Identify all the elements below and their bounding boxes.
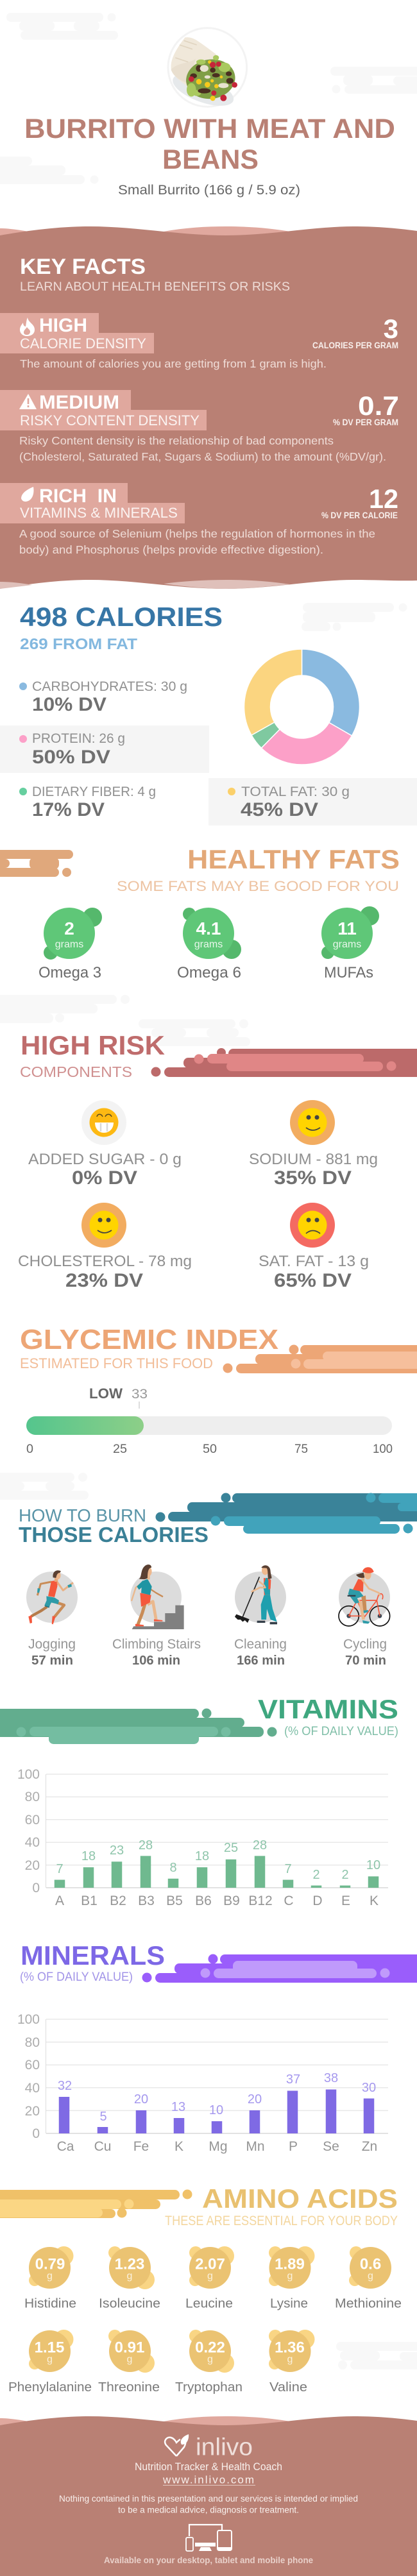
badge: omega 3: 2 [64, 919, 74, 938]
bar chart: minerals: K [174, 2139, 183, 2154]
gray row panels [0, 725, 417, 826]
bar chart: minerals: 20 [134, 2092, 148, 2106]
gauge scale [26, 1442, 393, 1456]
bar chart: minerals: P [289, 2139, 298, 2154]
amino: methionine: 0.6 [360, 2255, 381, 2273]
food image: burrito [168, 28, 247, 112]
bar chart: minerals: 80 [25, 2035, 40, 2050]
bar chart: vitamins: 7 [56, 1862, 64, 1876]
icon: warning triangle [19, 394, 37, 409]
fact: calorie density: 3 [384, 314, 398, 344]
legend: protein: PROTEIN: 26 g [32, 731, 125, 746]
tagline: Nutrition Tracker & Health Coach [135, 2461, 282, 2473]
bar chart: vitamins: B12 [248, 1894, 273, 1908]
logo: inlivo [165, 2434, 253, 2461]
bar chart: vitamins: B9 [223, 1894, 240, 1908]
gauge scale: 75 [294, 1442, 308, 1456]
disclaimer: to be a medical advice, diagnosis or treatment. [118, 2504, 299, 2514]
fact: calorie density: CALORIE DENSITY [20, 335, 146, 352]
amino: tryptophan: g [207, 2354, 213, 2365]
amino: tryptophan: Tryptophan [175, 2380, 243, 2394]
heading: amino acids: AMINO ACIDS [202, 2183, 398, 2214]
bar chart: vitamins: E [341, 1894, 350, 1908]
bar chart: minerals: 37 [286, 2072, 300, 2087]
panel: amino acids [0, 2183, 402, 2394]
bar chart: minerals: Mn [246, 2139, 265, 2154]
heading: calories: 498 CALORIES [20, 602, 223, 632]
badge: omega 3: grams [55, 939, 83, 950]
bar chart: minerals: 10 [209, 2103, 223, 2117]
bar chart: vitamins: 80 [25, 1790, 40, 1804]
bar chart: minerals: 5 [99, 2110, 107, 2124]
badge: omega 6: 4.1 [196, 919, 221, 938]
item: cholesterol: 23% DV [65, 1270, 143, 1291]
item: sodium: SODIUM - 881 mg [249, 1151, 378, 1168]
heading: those calories: THOSE CALORIES [19, 1523, 208, 1546]
amino: leucine: Leucine [185, 2296, 233, 2310]
bar chart: vitamins: 2 [312, 1868, 320, 1882]
bar chart: vitamins: B6 [195, 1894, 212, 1908]
item: added sugar: ADDED SUGAR - 0 g [28, 1151, 182, 1168]
heading: high risk: HIGH RISK [21, 1030, 165, 1060]
amino: lysine: Lysine [270, 2296, 308, 2310]
decorative streak: high risk [151, 1048, 417, 1077]
item: added sugar [28, 1100, 182, 1189]
subheading: (% OF DAILY VALUE) [284, 1725, 398, 1738]
decorative streak: glycemic [223, 1344, 417, 1373]
bar chart: vitamins: K [370, 1894, 379, 1908]
bar chart: minerals: 60 [25, 2058, 40, 2072]
amino: lysine [269, 2246, 314, 2310]
subheading: (% OF DAILY VALUE) [20, 1970, 133, 1984]
exercise: climbing stairs: 106 min [132, 1654, 180, 1668]
bar chart: vitamins: 40 [25, 1835, 40, 1850]
decorative streak: minerals [142, 1954, 417, 1983]
exercise: cleaning [234, 1565, 287, 1668]
donut chart [244, 649, 359, 765]
bar chart: vitamins [17, 1767, 388, 1908]
amino: phenylalanine: Phenylalanine [8, 2380, 92, 2394]
legend: dietary fiber: DIETARY FIBER: 4 g [32, 784, 156, 799]
amino: lysine: 1.89 [275, 2255, 305, 2273]
heading: glycemic index: GLYCEMIC INDEX [20, 1324, 278, 1355]
amino: leucine: g [207, 2271, 213, 2282]
exercise: jogging: Jogging [28, 1637, 76, 1652]
amino: methionine [335, 2246, 402, 2310]
amino: valine: 1.36 [275, 2339, 305, 2357]
panel: glycemic index [20, 1324, 417, 1456]
bar chart: minerals: Zn [362, 2139, 377, 2154]
amino: valine: g [287, 2354, 293, 2365]
exercise: cycling [339, 1567, 390, 1668]
bar chart: vitamins: B5 [166, 1894, 183, 1908]
badge: omega 6 [177, 908, 241, 981]
bar chart: minerals: 20 [25, 2104, 40, 2119]
bar chart: minerals [17, 2012, 388, 2154]
item: saturated fat [259, 1203, 369, 1291]
amino: leucine [185, 2246, 234, 2310]
amino: threonine [98, 2330, 160, 2394]
exercise: jogging: 57 min [31, 1654, 73, 1668]
bar chart: vitamins: 2 [341, 1868, 349, 1882]
badge: omega 3 [38, 908, 102, 981]
fact: calorie density: CALORIES PER GRAM [312, 341, 398, 350]
bar chart: vitamins: 18 [195, 1849, 209, 1863]
fact: risky content density: RISKY CONTENT DENSITY [20, 412, 200, 428]
legend: dietary fiber: 17% DV [32, 799, 105, 820]
bar chart: minerals: Cu [94, 2139, 111, 2154]
item: saturated fat: SAT. FAT - 13 g [259, 1253, 369, 1270]
bar chart: minerals: 38 [324, 2071, 338, 2085]
legend: carbohydrates: 10% DV [32, 694, 106, 715]
title: BEANS [162, 144, 259, 175]
icon: leaf [21, 487, 33, 502]
bar chart: minerals: Se [323, 2139, 339, 2154]
fact: risky content density: 0.7 [358, 391, 399, 421]
panel: footer [0, 2416, 417, 2576]
panel: calories [0, 602, 417, 826]
website: www.inlivo.com [162, 2473, 254, 2486]
badge: mufas: 11 [337, 919, 357, 938]
bar chart: minerals: 100 [17, 2012, 40, 2027]
legend: carbohydrates: CARBOHYDRATES: 30 g [32, 679, 187, 694]
amino: isoleucine: g [127, 2271, 132, 2282]
item: saturated fat: 65% DV [274, 1270, 352, 1291]
legend: total fat: 45% DV [241, 799, 318, 820]
amino: histidine: Histidine [24, 2296, 76, 2310]
disclaimer [59, 2493, 358, 2514]
gauge label: LOW [89, 1385, 123, 1402]
fact: risky content density: MEDIUM [39, 392, 119, 413]
gauge scale: 0 [26, 1442, 33, 1456]
logo: inlivo: inlivo [196, 2434, 253, 2461]
amino: leucine: 2.07 [195, 2255, 225, 2273]
legend: protein [19, 731, 125, 768]
bar chart: vitamins: 100 [17, 1767, 40, 1782]
subheading: from fat: 269 FROM FAT [20, 636, 137, 653]
title: BURRITO WITH MEAT AND [24, 114, 395, 144]
fact: rich in vitamins and minerals: VITAMINS & MINERALS [20, 505, 178, 521]
badge: omega 3: Omega 3 [38, 964, 101, 981]
panel: vitamins [0, 1694, 398, 1908]
amino: threonine: g [127, 2354, 132, 2365]
subheading: ESTIMATED FOR THIS FOOD [20, 1355, 213, 1371]
fact: calorie density: HIGH [39, 315, 87, 336]
fact: calorie density: The amount of calories you are getting from 1 gram is high. [20, 357, 327, 370]
heading: key facts: KEY FACTS [20, 255, 146, 279]
disclaimer: Nothing contained in this presentation and our services is intended or implied [59, 2493, 358, 2504]
badge: mufas: grams [333, 939, 361, 950]
bar chart: vitamins: 25 [224, 1841, 238, 1855]
legend: protein: 50% DV [32, 747, 110, 768]
exercise: jogging [26, 1570, 78, 1668]
fact: rich in vitamins and minerals: A good source of Selenium (helps the regulation of hormones in the [19, 527, 375, 540]
bar chart: minerals: 13 [171, 2100, 185, 2114]
bar chart: minerals: Mg [208, 2139, 228, 2154]
amino: threonine: 0.91 [115, 2339, 144, 2357]
amino: histidine [24, 2246, 76, 2310]
panel: healthy fats [0, 844, 400, 981]
fact: calorie density [0, 313, 398, 370]
badge: omega 6: grams [194, 939, 223, 950]
item: added sugar: 0% DV [72, 1167, 137, 1189]
amino: methionine: Methionine [335, 2296, 402, 2310]
bar chart: vitamins: 10 [366, 1858, 380, 1872]
panel: high risk components [18, 1030, 417, 1291]
amino: histidine: 0.79 [35, 2255, 65, 2273]
bar chart: vitamins: 18 [81, 1849, 96, 1863]
decorative streak: healthy fats [0, 850, 73, 877]
heading: minerals: MINERALS [21, 1940, 165, 1970]
amino: phenylalanine: 1.15 [35, 2339, 64, 2357]
fact: rich in vitamins and minerals: RICH IN [39, 486, 117, 507]
panel: minerals [17, 1940, 417, 2154]
bar chart: vitamins: 20 [25, 1858, 40, 1873]
subheading: LEARN ABOUT HEALTH BENEFITS OR RISKS [20, 280, 290, 294]
bar chart: vitamins: 60 [25, 1813, 40, 1827]
bar chart: vitamins: 0 [32, 1881, 40, 1895]
decorative streak: amino acids [0, 2190, 192, 2218]
fact: rich in vitamins and minerals: 12 [369, 484, 398, 514]
legend: total fat: TOTAL FAT: 30 g [241, 784, 350, 799]
amino: isoleucine [99, 2246, 160, 2310]
subheading: components: COMPONENTS [20, 1063, 132, 1080]
amino: lysine: g [287, 2271, 293, 2282]
availability note: Available on your desktop, tablet and mobile phone [104, 2555, 313, 2565]
bar chart: minerals: 40 [25, 2081, 40, 2096]
exercise: cleaning: Cleaning [234, 1637, 287, 1652]
amino: isoleucine: Isoleucine [99, 2296, 160, 2310]
amino: tryptophan [175, 2330, 243, 2394]
amino: methionine: g [368, 2271, 373, 2282]
exercise: cycling: Cycling [343, 1637, 387, 1652]
bar chart: vitamins: C [284, 1894, 294, 1908]
bar chart: vitamins: 28 [139, 1838, 153, 1852]
exercise: climbing stairs: Climbing Stairs [112, 1637, 201, 1652]
badge: omega 6: Omega 6 [177, 964, 241, 981]
gauge bar [26, 1416, 392, 1435]
fact: risky content density: % DV PER GRAM [333, 418, 398, 427]
panel: key facts [0, 226, 417, 589]
bar chart: minerals: Fe [133, 2139, 149, 2154]
gauge scale: 25 [113, 1442, 127, 1456]
legend: dietary fiber [19, 784, 156, 820]
fact: rich in vitamins and minerals: body) and Phosphorus (helps provide effective digestion). [19, 543, 323, 556]
bar chart: vitamins: B2 [110, 1894, 126, 1908]
bar chart: vitamins: D [312, 1894, 323, 1908]
amino: phenylalanine [8, 2330, 92, 2394]
exercise: cleaning: 166 min [237, 1654, 285, 1668]
badge: mufas [321, 906, 379, 981]
amino: isoleucine: 1.23 [115, 2255, 144, 2273]
panel: how to burn calories [19, 1493, 417, 1668]
fact: risky content density: Risky Content density is the relationship of bad components [19, 434, 334, 447]
bar chart: minerals: 30 [362, 2081, 376, 2095]
amino: valine: Valine [269, 2380, 307, 2394]
item: cholesterol [18, 1203, 192, 1291]
subheading: SOME FATS MAY BE GOOD FOR YOU [117, 878, 399, 894]
exercise: cycling: 70 min [345, 1654, 386, 1668]
heading: healthy fats: HEALTHY FATS [187, 844, 400, 874]
bar chart: vitamins: 8 [169, 1861, 177, 1875]
item: cholesterol: CHOLESTEROL - 78 mg [18, 1253, 192, 1270]
legend: total fat [228, 784, 350, 820]
gauge scale: 100 [373, 1442, 393, 1456]
bar chart: vitamins: 23 [110, 1843, 124, 1858]
decorative streak: burn [155, 1493, 417, 1534]
legend: carbohydrates [19, 679, 187, 715]
amino: threonine: Threonine [98, 2380, 160, 2394]
gauge scale: 50 [203, 1442, 217, 1456]
bar chart: vitamins: 28 [253, 1838, 267, 1852]
badge: mufas: MUFAs [324, 964, 373, 981]
bar chart: vitamins: 7 [284, 1862, 292, 1876]
fact: rich in vitamins and minerals: % DV PER CALORIE [321, 511, 398, 520]
heading: how to burn: HOW TO BURN [19, 1505, 146, 1525]
amino: phenylalanine: g [47, 2354, 53, 2365]
decorative streak: vitamins [0, 1709, 277, 1744]
exercise: climbing stairs [112, 1564, 201, 1668]
fact: risky content density: (Cholesterol, Saturated Fat, Sugars & Sodium) to the amount (%DV/gr). [19, 450, 386, 463]
bar chart: minerals: Ca [57, 2139, 74, 2154]
bar chart: minerals: 0 [32, 2126, 40, 2141]
bar chart: vitamins: A [55, 1894, 64, 1908]
fact: rich in vitamins and minerals [0, 483, 398, 556]
bar chart: minerals: 32 [58, 2079, 72, 2093]
item: sodium: 35% DV [274, 1167, 352, 1189]
subtitle: serving size: Small Burrito (166 g / 5.9 oz) [118, 183, 300, 198]
amino: tryptophan: 0.22 [195, 2339, 225, 2357]
heading: vitamins: VITAMINS [258, 1694, 398, 1724]
title [24, 114, 395, 175]
fact: risky content density [0, 390, 399, 463]
bar chart: vitamins: B3 [138, 1894, 155, 1908]
icon: devices [186, 2525, 232, 2551]
bar chart: vitamins: B1 [81, 1894, 98, 1908]
amino: valine [269, 2330, 314, 2394]
bar chart: minerals: 20 [248, 2092, 262, 2106]
item: sodium [249, 1100, 378, 1189]
gauge label [89, 1385, 148, 1409]
gauge label: 33 [132, 1387, 148, 1402]
amino: histidine: g [47, 2271, 53, 2282]
icon: flame [20, 318, 35, 336]
